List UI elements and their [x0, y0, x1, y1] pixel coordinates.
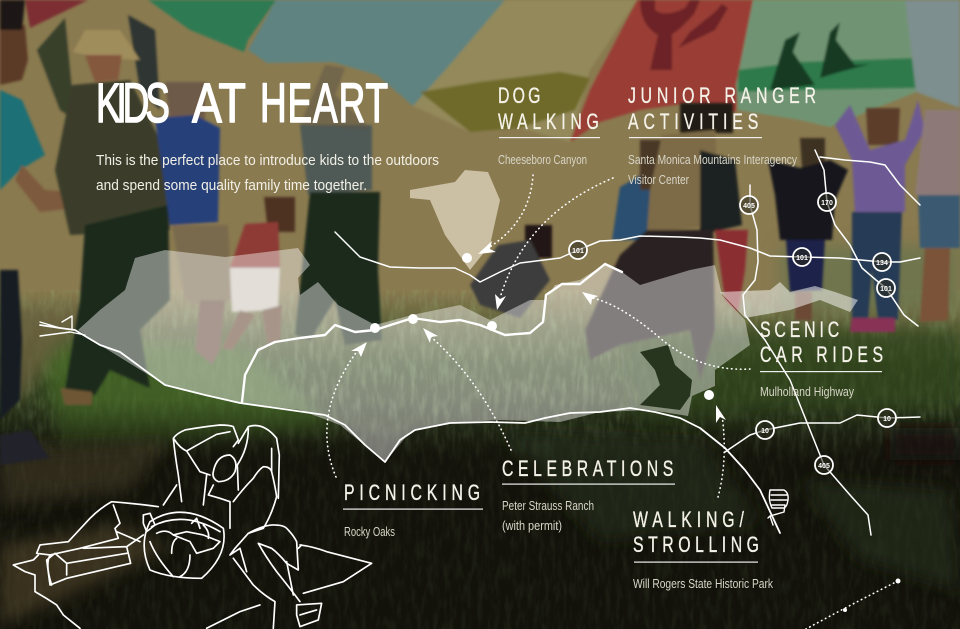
title: kids at heart: KIDS: [96, 72, 170, 135]
callout: dog walking: DOG: [498, 85, 540, 109]
canopy: red panel with cactus: [570, 0, 753, 142]
dotted trail: bottom right: [806, 578, 900, 629]
arrow: walking strolling: [716, 405, 726, 497]
arrow: dog walking: [478, 175, 533, 254]
person: boy at left edge: [0, 0, 110, 465]
shield 10 west: [756, 421, 774, 439]
shield 134: 134: [876, 260, 888, 267]
group: children and adult at centre: [585, 103, 748, 380]
callout: junior ranger activities: ACTIVITIES: [628, 111, 758, 135]
shield 10 east: [878, 409, 896, 427]
map line: coastline: [40, 325, 780, 533]
callout: scenic car rides: CAR RIDES: [760, 344, 883, 368]
dark holes in map: [640, 345, 692, 410]
callout: junior ranger activities: Visitor Center: [628, 173, 689, 187]
basket: [144, 512, 224, 578]
arrow: scenic car rides: [582, 292, 750, 369]
map region: eastern scattered parks: [720, 282, 858, 318]
dashed leader arrows: [327, 175, 900, 629]
shield 170: 170: [821, 200, 833, 207]
callout: celebrations: [502, 458, 675, 533]
figure: reclining legs: [37, 502, 158, 585]
callout: dog walking: Cheeseboro Canyon: [498, 153, 587, 167]
canopy: blue right panel: [905, 0, 960, 108]
canopy: green panel with wolves: [736, 0, 916, 127]
shield 101 east: [877, 279, 895, 297]
location dots: [370, 253, 714, 400]
map: coastline and boundary lines: [40, 264, 780, 533]
title: kids at heart: HEART: [260, 72, 388, 135]
canopy: yellow panel: [413, 0, 637, 142]
callout: scenic car rides: [760, 319, 883, 399]
person: boy in black shirt: [768, 138, 848, 320]
shield 405 north: [740, 196, 758, 214]
arrow: celebrations: [423, 328, 511, 450]
callout: scenic car rides: Mulholland Highway: [760, 385, 855, 399]
map region: main coastal mountains: [78, 248, 750, 462]
person: girl in purple shirt: [835, 100, 925, 332]
figure: head: [213, 455, 236, 482]
callout: walking strolling: Will Rogers State Historic Park: [633, 577, 774, 591]
callout: junior ranger activities: [628, 85, 816, 187]
picnic blanket: [13, 545, 372, 628]
callout: junior ranger activities: Santa Monica Mountains Interagency: [628, 153, 798, 167]
icon: fist: [768, 490, 788, 525]
arrow: junior ranger: [495, 178, 613, 310]
shield 10 east: 10: [883, 416, 891, 423]
shield 101 centre: 101: [796, 255, 808, 262]
shield 134: [873, 253, 891, 271]
shield 405 north: 405: [743, 203, 755, 210]
person: bending child: [470, 225, 552, 318]
highway 101: [335, 232, 920, 282]
parachute canopy: [25, 0, 960, 142]
people in photo: [0, 0, 960, 465]
shield 101 west: [569, 241, 587, 259]
shield 101 east: 101: [880, 286, 892, 293]
figure: seated person with arm raised: [163, 425, 238, 528]
person: right edge figure: [915, 110, 960, 322]
shield 405 south: [815, 456, 833, 474]
arrow: picnicking: [327, 342, 367, 477]
callout: dog walking: WALKING: [498, 111, 599, 135]
shield 10 west: 10: [761, 428, 769, 435]
title: kids at heart: [96, 71, 388, 135]
canopy: blue panel: [248, 0, 505, 106]
callout: dog walking: [498, 85, 600, 167]
highway 134 branch: [820, 157, 920, 205]
illustration: picnic couple line drawing: [13, 425, 372, 628]
highway 170: [815, 150, 918, 326]
intro text block: This is the perfect place to introduce kids to the outdoors: [96, 153, 439, 169]
callout: walking strolling: STROLLING: [633, 534, 759, 558]
canopy: red left panel: [25, 0, 88, 28]
shield 101 west: 101: [572, 248, 584, 255]
highway network: [335, 150, 920, 535]
highway shields: [569, 193, 896, 474]
figure: long hair and dress of second person: [230, 426, 300, 628]
callout: walking strolling: [633, 509, 774, 591]
highway 10: [725, 415, 920, 452]
canopy: green panel: [148, 0, 276, 52]
intro text block: and spend some quality family time together.: [96, 178, 367, 194]
map line: trail tangle at west end: [40, 316, 85, 336]
callout: walking strolling: WALKING/: [633, 509, 744, 533]
person: child in red top: [222, 197, 295, 350]
callout: junior ranger activities: JUNIOR RANGER: [628, 85, 816, 109]
callout: picnicking: Rocky Oaks: [344, 525, 395, 539]
callout: celebrations: (with permit): [502, 519, 562, 533]
shield 405 south: 405: [818, 463, 830, 470]
map: mountains recreation area fill: [78, 170, 858, 462]
callout: celebrations: CELEBRATIONS: [502, 458, 673, 482]
shield 170: [818, 193, 836, 211]
person: ranger on right with grey shirt: [295, 65, 382, 345]
shield 101 centre: [793, 248, 811, 266]
highway 405: [743, 185, 871, 535]
callout: picnicking: [343, 482, 483, 539]
map region: north park block: [410, 170, 500, 270]
callout: picnicking: PICNICKING: [344, 482, 480, 506]
callout: celebrations: Peter Strauss Ranch: [502, 499, 594, 513]
map line: inner park boundary: [242, 264, 622, 402]
person: ranger with hat: [37, 15, 170, 405]
callout: scenic car rides: SCENIC: [760, 319, 839, 343]
figure: feet: [297, 603, 322, 627]
title: kids at heart: AT: [192, 71, 246, 134]
person: grey haired adult in blue shirt: [155, 82, 232, 365]
intro text block: [96, 153, 439, 194]
